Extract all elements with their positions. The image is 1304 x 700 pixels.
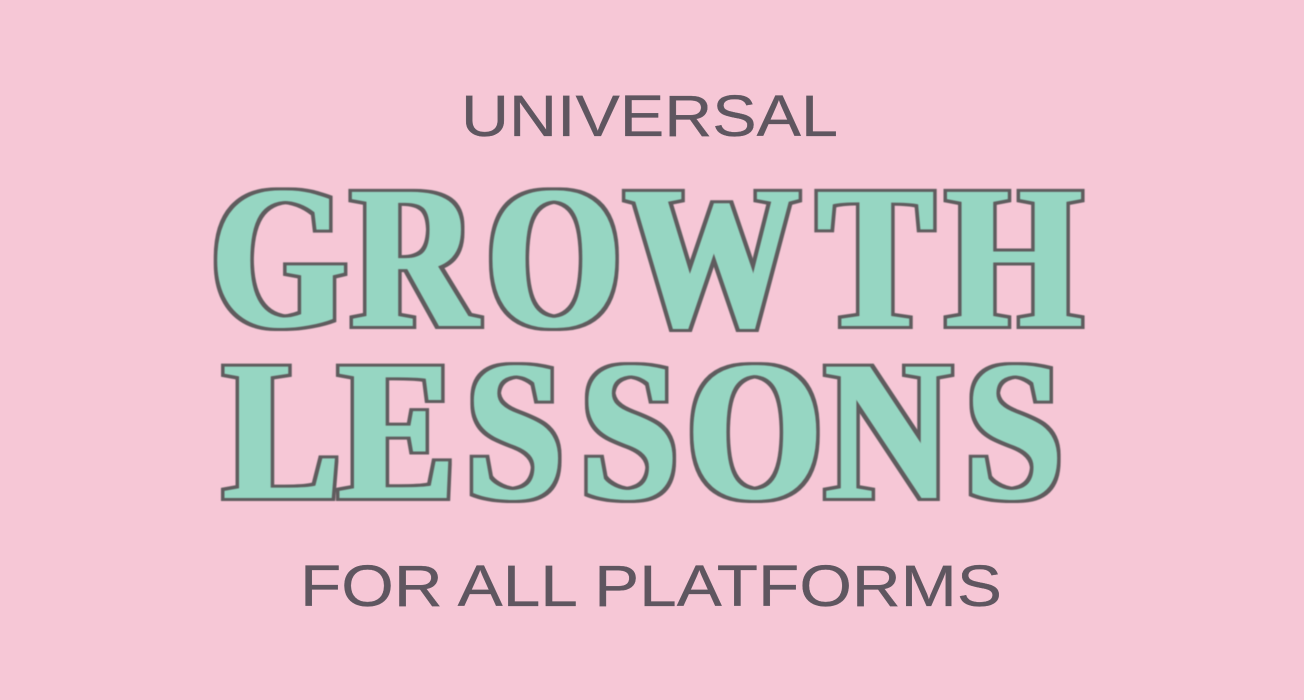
heading: growth lessons bbox=[211, 145, 1081, 542]
heading line: growth: GROWTH bbox=[211, 145, 1081, 371]
subheading: for all platforms: FOR ALL PLATFORMS bbox=[300, 554, 1002, 619]
heading line: lessons: LESSONS bbox=[224, 319, 1062, 542]
eyebrow: universal: UNIVERSAL bbox=[461, 84, 838, 149]
